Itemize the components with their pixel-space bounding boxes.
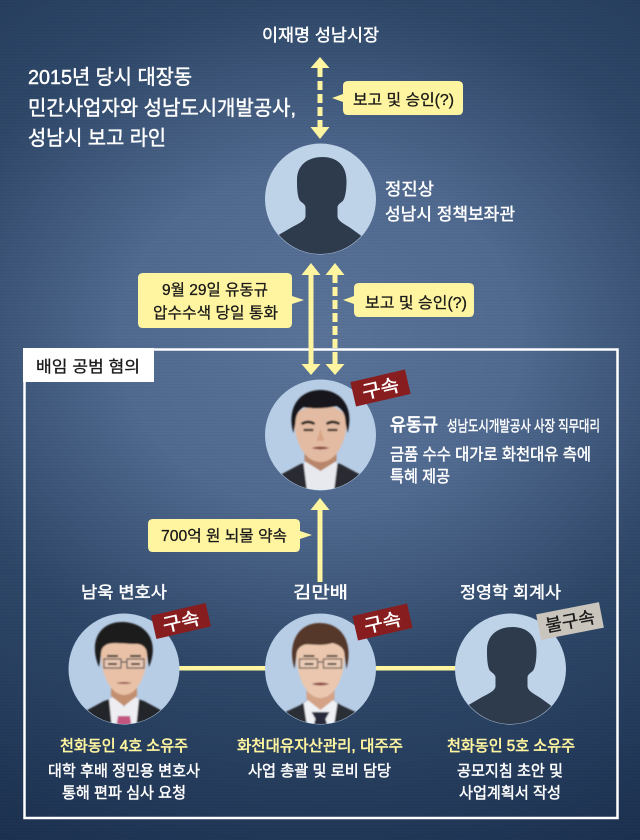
badge: arrested Kim: 구속 [362, 608, 403, 637]
badge: not arrested: 불구속 [544, 607, 597, 636]
frame label: 배임 공범 혐의 [36, 358, 140, 376]
label: Jeong Jin-sang [385, 180, 515, 224]
label: Yoo Dong-gyu [390, 415, 600, 486]
text: Kim Man-bae [237, 737, 403, 780]
top label: mayor: 이재명 성남시장 [262, 26, 379, 45]
arrow: dashed double [326, 263, 344, 375]
text: Jeong Yeong-hak: 공모지침 초안 및 [457, 762, 563, 780]
title: 2015년 당시 대장동 [28, 66, 192, 89]
badge: arrested Yoo: 구속 [360, 374, 401, 403]
names [81, 583, 561, 602]
badge: arrested Kim [352, 604, 413, 640]
label: Jeong Jin-sang: 성남시 정책보좌관 [385, 205, 515, 224]
text: Nam Wook: 천화동인 4호 소유주 [60, 737, 188, 755]
title [28, 66, 296, 150]
callout: report and approval middle: 보고 및 승인(?) [365, 294, 467, 312]
portrait: Nam Wook [68, 614, 180, 729]
names: 김만배 [293, 583, 348, 602]
arrow: dashed mayor to Jeong [310, 57, 330, 139]
text: Nam Wook [48, 737, 200, 802]
callout: September 29 call: 9월 29일 유동규 [162, 281, 268, 299]
callout: 70 billion won bribe [148, 519, 312, 552]
badge: arrested Nam [151, 603, 211, 639]
callout: 70 billion won bribe: 700억 원 뇌물 약속 [161, 527, 287, 545]
portrait: Jeong Jin-sang silhouette [265, 144, 376, 259]
text: Jeong Yeong-hak: 천화동인 5호 소유주 [447, 737, 575, 755]
badge: arrested Nam: 구속 [161, 607, 202, 636]
callout: report and approval top: 보고 및 승인(?) [353, 91, 454, 109]
names: 정영학 회계사 [460, 583, 561, 602]
text: Nam Wook: 통해 편파 심사 요청 [62, 784, 186, 802]
text: Jeong Yeong-hak [447, 737, 575, 802]
callout: September 29 call: 압수수색 당일 통화 [153, 304, 278, 322]
title: 성남시 보고 라인 [28, 127, 166, 150]
callout: September 29 call [138, 273, 304, 328]
text: Nam Wook: 대학 후배 정민용 변호사 [48, 762, 200, 780]
text: Kim Man-bae: 사업 총괄 및 로비 담당 [248, 762, 391, 780]
label: Jeong Jin-sang: 정진상 [385, 180, 434, 199]
label: Yoo Dong-gyu: 유동규 [390, 415, 438, 435]
badge: arrested Yoo [350, 370, 411, 406]
badge: not arrested [536, 602, 604, 640]
connector lines [176, 666, 458, 670]
arrow: Kim to Yoo [310, 498, 330, 582]
portrait: Jeong Yeong-hak silhouette [455, 614, 566, 729]
title: 민간사업자와 성남도시개발공사, [28, 97, 296, 120]
portrait: Kim Man-bae [265, 614, 376, 729]
arrow: solid double [302, 263, 320, 375]
label: Yoo Dong-gyu: 특혜 제공 [390, 467, 450, 486]
label: Yoo Dong-gyu: 금품 수수 대가로 화천대유 측에 [390, 445, 591, 464]
callout: report and approval top [332, 81, 463, 115]
frame label [23, 348, 154, 382]
portrait: Yoo Dong-gyu [265, 380, 376, 495]
text: Jeong Yeong-hak: 사업계획서 작성 [459, 784, 561, 802]
frame: breach of trust accomplices [24, 350, 618, 818]
names: 남욱 변호사 [81, 583, 167, 602]
text: Kim Man-bae: 화천대유자산관리, 대주주 [237, 737, 403, 755]
callout: report and approval middle [343, 283, 474, 317]
